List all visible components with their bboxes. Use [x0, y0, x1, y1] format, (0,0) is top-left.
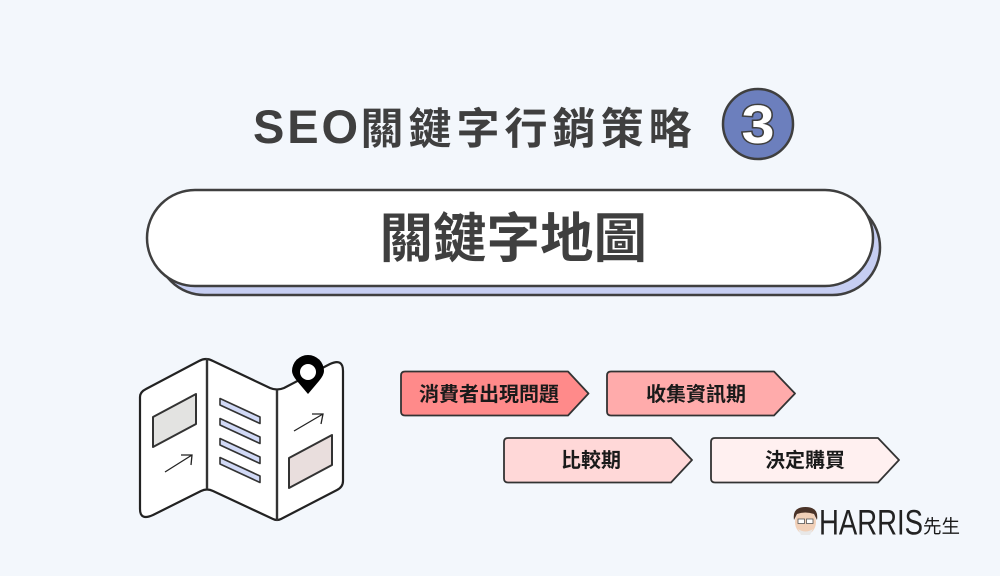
- stage arrow: consumer problem appears: [401, 372, 588, 416]
- title: [253, 100, 696, 154]
- stage arrow: information gathering: 收集資訊期: [646, 382, 746, 406]
- stage arrow: purchase decision: 決定購買: [765, 448, 845, 472]
- stage arrow: information gathering: [607, 372, 795, 416]
- stage arrow: purchase decision: [711, 438, 899, 482]
- stage arrow: comparison: 比較期: [561, 448, 621, 472]
- title: 關鍵字行銷策略: [360, 106, 696, 154]
- map right arrow: [294, 414, 323, 431]
- stage arrow: comparison: [504, 438, 692, 482]
- badge: number 3: [723, 89, 793, 159]
- map right picture: [289, 435, 332, 488]
- logo chinese: 先生: [923, 516, 960, 537]
- stage arrow: consumer problem appears: 消費者出現問題: [419, 383, 559, 406]
- banner: keyword map: [147, 190, 880, 295]
- map left picture: [153, 394, 196, 447]
- logo wordmark: HARRIS: [819, 504, 923, 542]
- logo: Harris: [794, 504, 960, 542]
- map folds: [207, 358, 277, 521]
- map text lines: [220, 398, 260, 482]
- map left arrow: [165, 455, 192, 472]
- icon: folded map with pin: [140, 355, 343, 521]
- banner heading: 關鍵字地圖: [380, 210, 647, 269]
- title: SEO: [253, 100, 358, 153]
- logo face: [794, 507, 817, 535]
- icon: location pin: [292, 355, 324, 394]
- badge: number 3: 3: [741, 95, 775, 155]
